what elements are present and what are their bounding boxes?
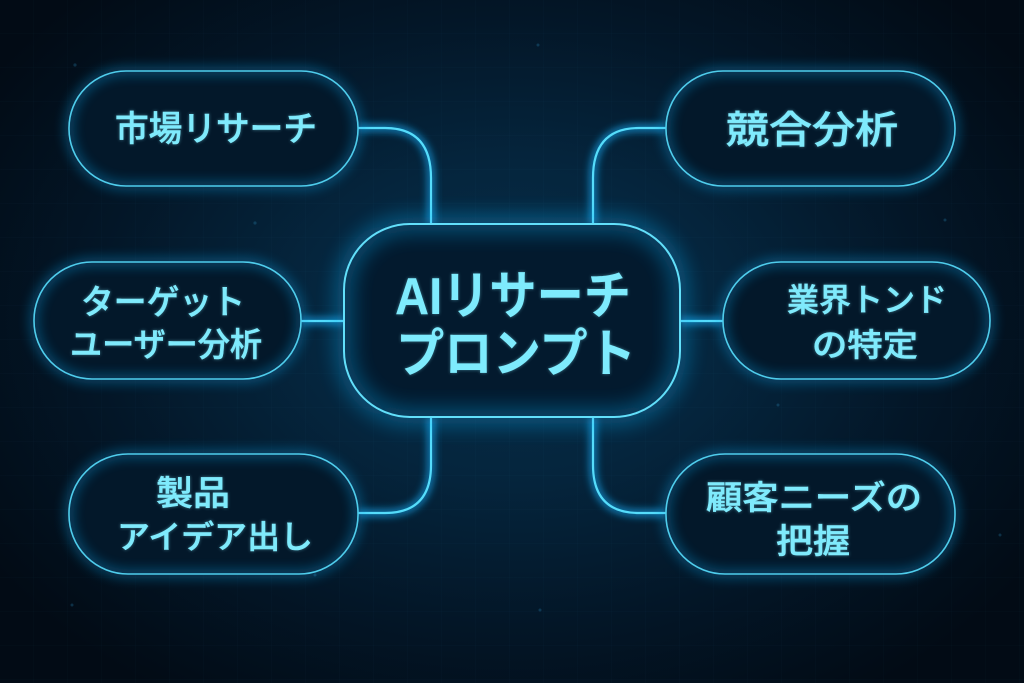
label: target line 1: ターゲット (81, 284, 245, 322)
panel: market research (69, 71, 358, 186)
heading: center title line 1: AIリサーチ (395, 268, 631, 326)
panel: product ideation (69, 454, 358, 574)
panel: competitor analysis (666, 71, 955, 186)
label: competitor analysis: 競合分析 (726, 110, 898, 152)
label: market research: 市場リサーチ (115, 110, 317, 149)
panel: center node (344, 224, 680, 417)
label: product line 2: アイデア出し (117, 519, 313, 555)
connector lines (301, 128, 723, 513)
panel: industry trends (723, 262, 990, 379)
heading: center title line 2: プロンプト (396, 326, 636, 384)
label: customer line 2: 把握 (776, 523, 850, 561)
label: trends line 1: 業界トンド (787, 282, 947, 318)
panel: customer needs (666, 454, 955, 574)
label: product line 1: 製品 (156, 475, 230, 513)
label: target line 2: ユーザー分析 (70, 326, 262, 363)
panel: target user analysis (34, 262, 301, 379)
label: customer line 1: 顧客ニーズの (706, 479, 922, 516)
label: trends line 2: の特定 (812, 327, 918, 363)
